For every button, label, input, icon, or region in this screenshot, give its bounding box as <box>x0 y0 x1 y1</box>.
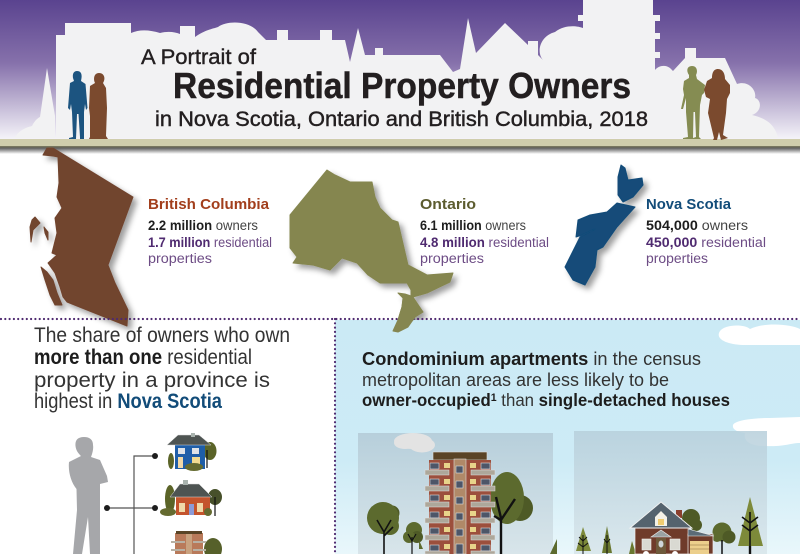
Ontario stats <box>420 196 549 266</box>
right panel text: metropolitan areas are less likely to be <box>362 370 669 390</box>
icon: blue house <box>167 433 216 471</box>
people: couple left <box>68 71 108 139</box>
British Columbia stats <box>148 196 272 266</box>
dotted dividers <box>1 319 800 554</box>
map: Nova Scotia <box>565 165 643 285</box>
icon: small apartment <box>171 531 222 554</box>
British Columbia stats: British Columbia <box>148 196 270 213</box>
cloud in apartment box <box>394 433 435 452</box>
Nova Scotia stats: Nova Scotia <box>646 196 732 213</box>
right panel text: owner-occupied <box>362 390 496 410</box>
left panel text <box>34 324 290 413</box>
apartment building <box>425 452 495 554</box>
left panel text: The share of owners who own <box>34 324 290 347</box>
trees around apartment <box>367 472 557 554</box>
title: Residential Property Owners <box>173 65 631 106</box>
Nova Scotia stats: properties <box>646 251 708 266</box>
left panel text: highest in Nova Scotia <box>34 390 222 413</box>
Ontario stats: properties <box>420 251 484 266</box>
Nova Scotia stats: 450,000 residential <box>646 235 766 250</box>
right panel text: than <box>497 390 539 410</box>
right panel text: 1 <box>491 392 497 404</box>
trees around house <box>576 497 763 554</box>
British Columbia stats: 1.7 million residential <box>148 235 272 250</box>
title: in Nova Scotia, Ontario and British Columbia, 2018 <box>155 107 648 131</box>
left panel text: property in a province is <box>34 369 270 392</box>
city skyline silhouette <box>15 0 778 138</box>
header sky background <box>0 0 800 140</box>
British Columbia stats: properties <box>148 251 212 266</box>
Nova Scotia stats <box>646 196 766 266</box>
person silhouette <box>69 437 108 554</box>
connector lines <box>104 453 158 554</box>
right panel text <box>362 348 730 410</box>
Nova Scotia stats: 504,000 owners <box>646 218 748 233</box>
Ontario tip over panel <box>393 300 423 332</box>
right panel text: Condominium apartments in the census <box>362 348 701 369</box>
right panel text: single-detached houses <box>539 390 738 410</box>
map: British Columbia <box>30 148 133 326</box>
Ontario stats: Ontario <box>420 196 476 213</box>
British Columbia stats: 2.2 million owners <box>148 218 258 233</box>
left panel text: more than one residential <box>34 346 252 369</box>
ground strip <box>0 139 800 154</box>
title: A Portrait of <box>141 46 256 69</box>
Ontario stats: 6.1 million owners <box>420 218 526 233</box>
people: couple right <box>681 66 730 140</box>
Ontario stats: 4.8 million residential <box>420 235 549 250</box>
panel: condominium comparison <box>335 320 800 554</box>
title <box>141 46 648 131</box>
map: Ontario <box>290 170 453 332</box>
detached house <box>630 502 714 554</box>
icon: red house <box>160 480 222 516</box>
